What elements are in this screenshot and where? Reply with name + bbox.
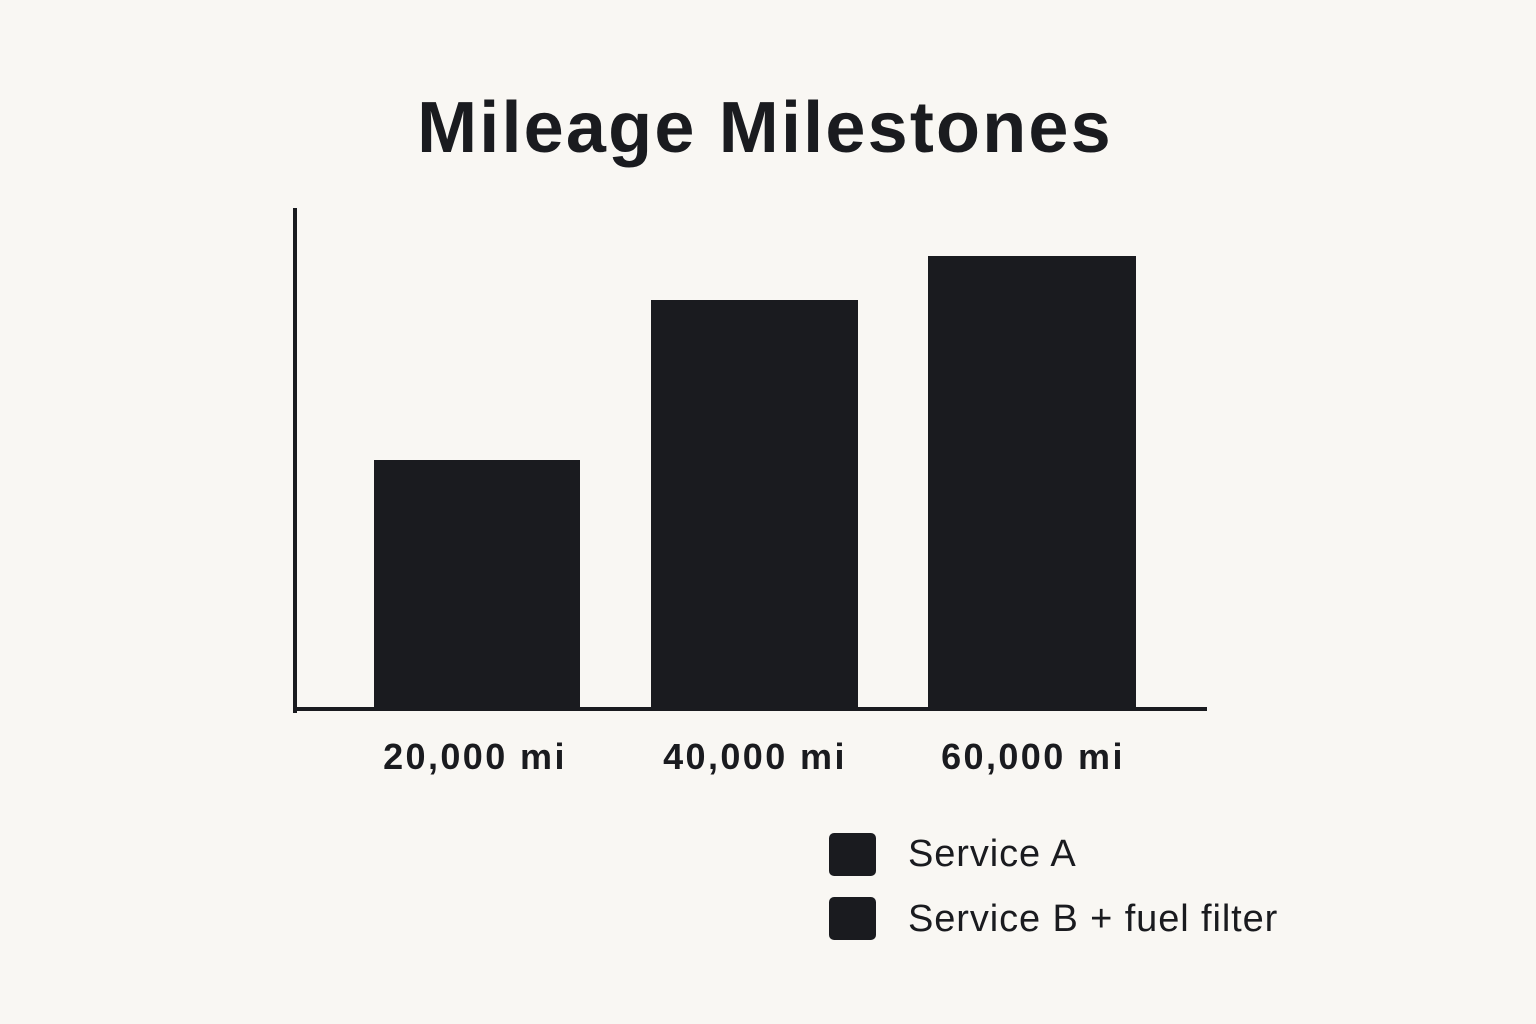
bar: 60,000 mi — [928, 256, 1136, 709]
legend — [829, 833, 1278, 940]
bar: 40,000 mi — [651, 300, 858, 709]
x label 60,000: 60,000 mi — [941, 736, 1125, 777]
title: Mileage Milestones — [417, 88, 1113, 168]
bar: 20,000 mi — [374, 460, 580, 709]
bar chart — [293, 208, 1207, 713]
legend item: Service A — [829, 833, 1077, 876]
y axis — [293, 208, 297, 713]
legend item: Service A: Service A — [908, 833, 1077, 875]
x label 40,000: 40,000 mi — [663, 736, 847, 777]
x label 20,000: 20,000 mi — [383, 736, 567, 777]
x axis — [293, 707, 1207, 711]
legend item: Service B: Service B + fuel filter — [908, 898, 1278, 940]
